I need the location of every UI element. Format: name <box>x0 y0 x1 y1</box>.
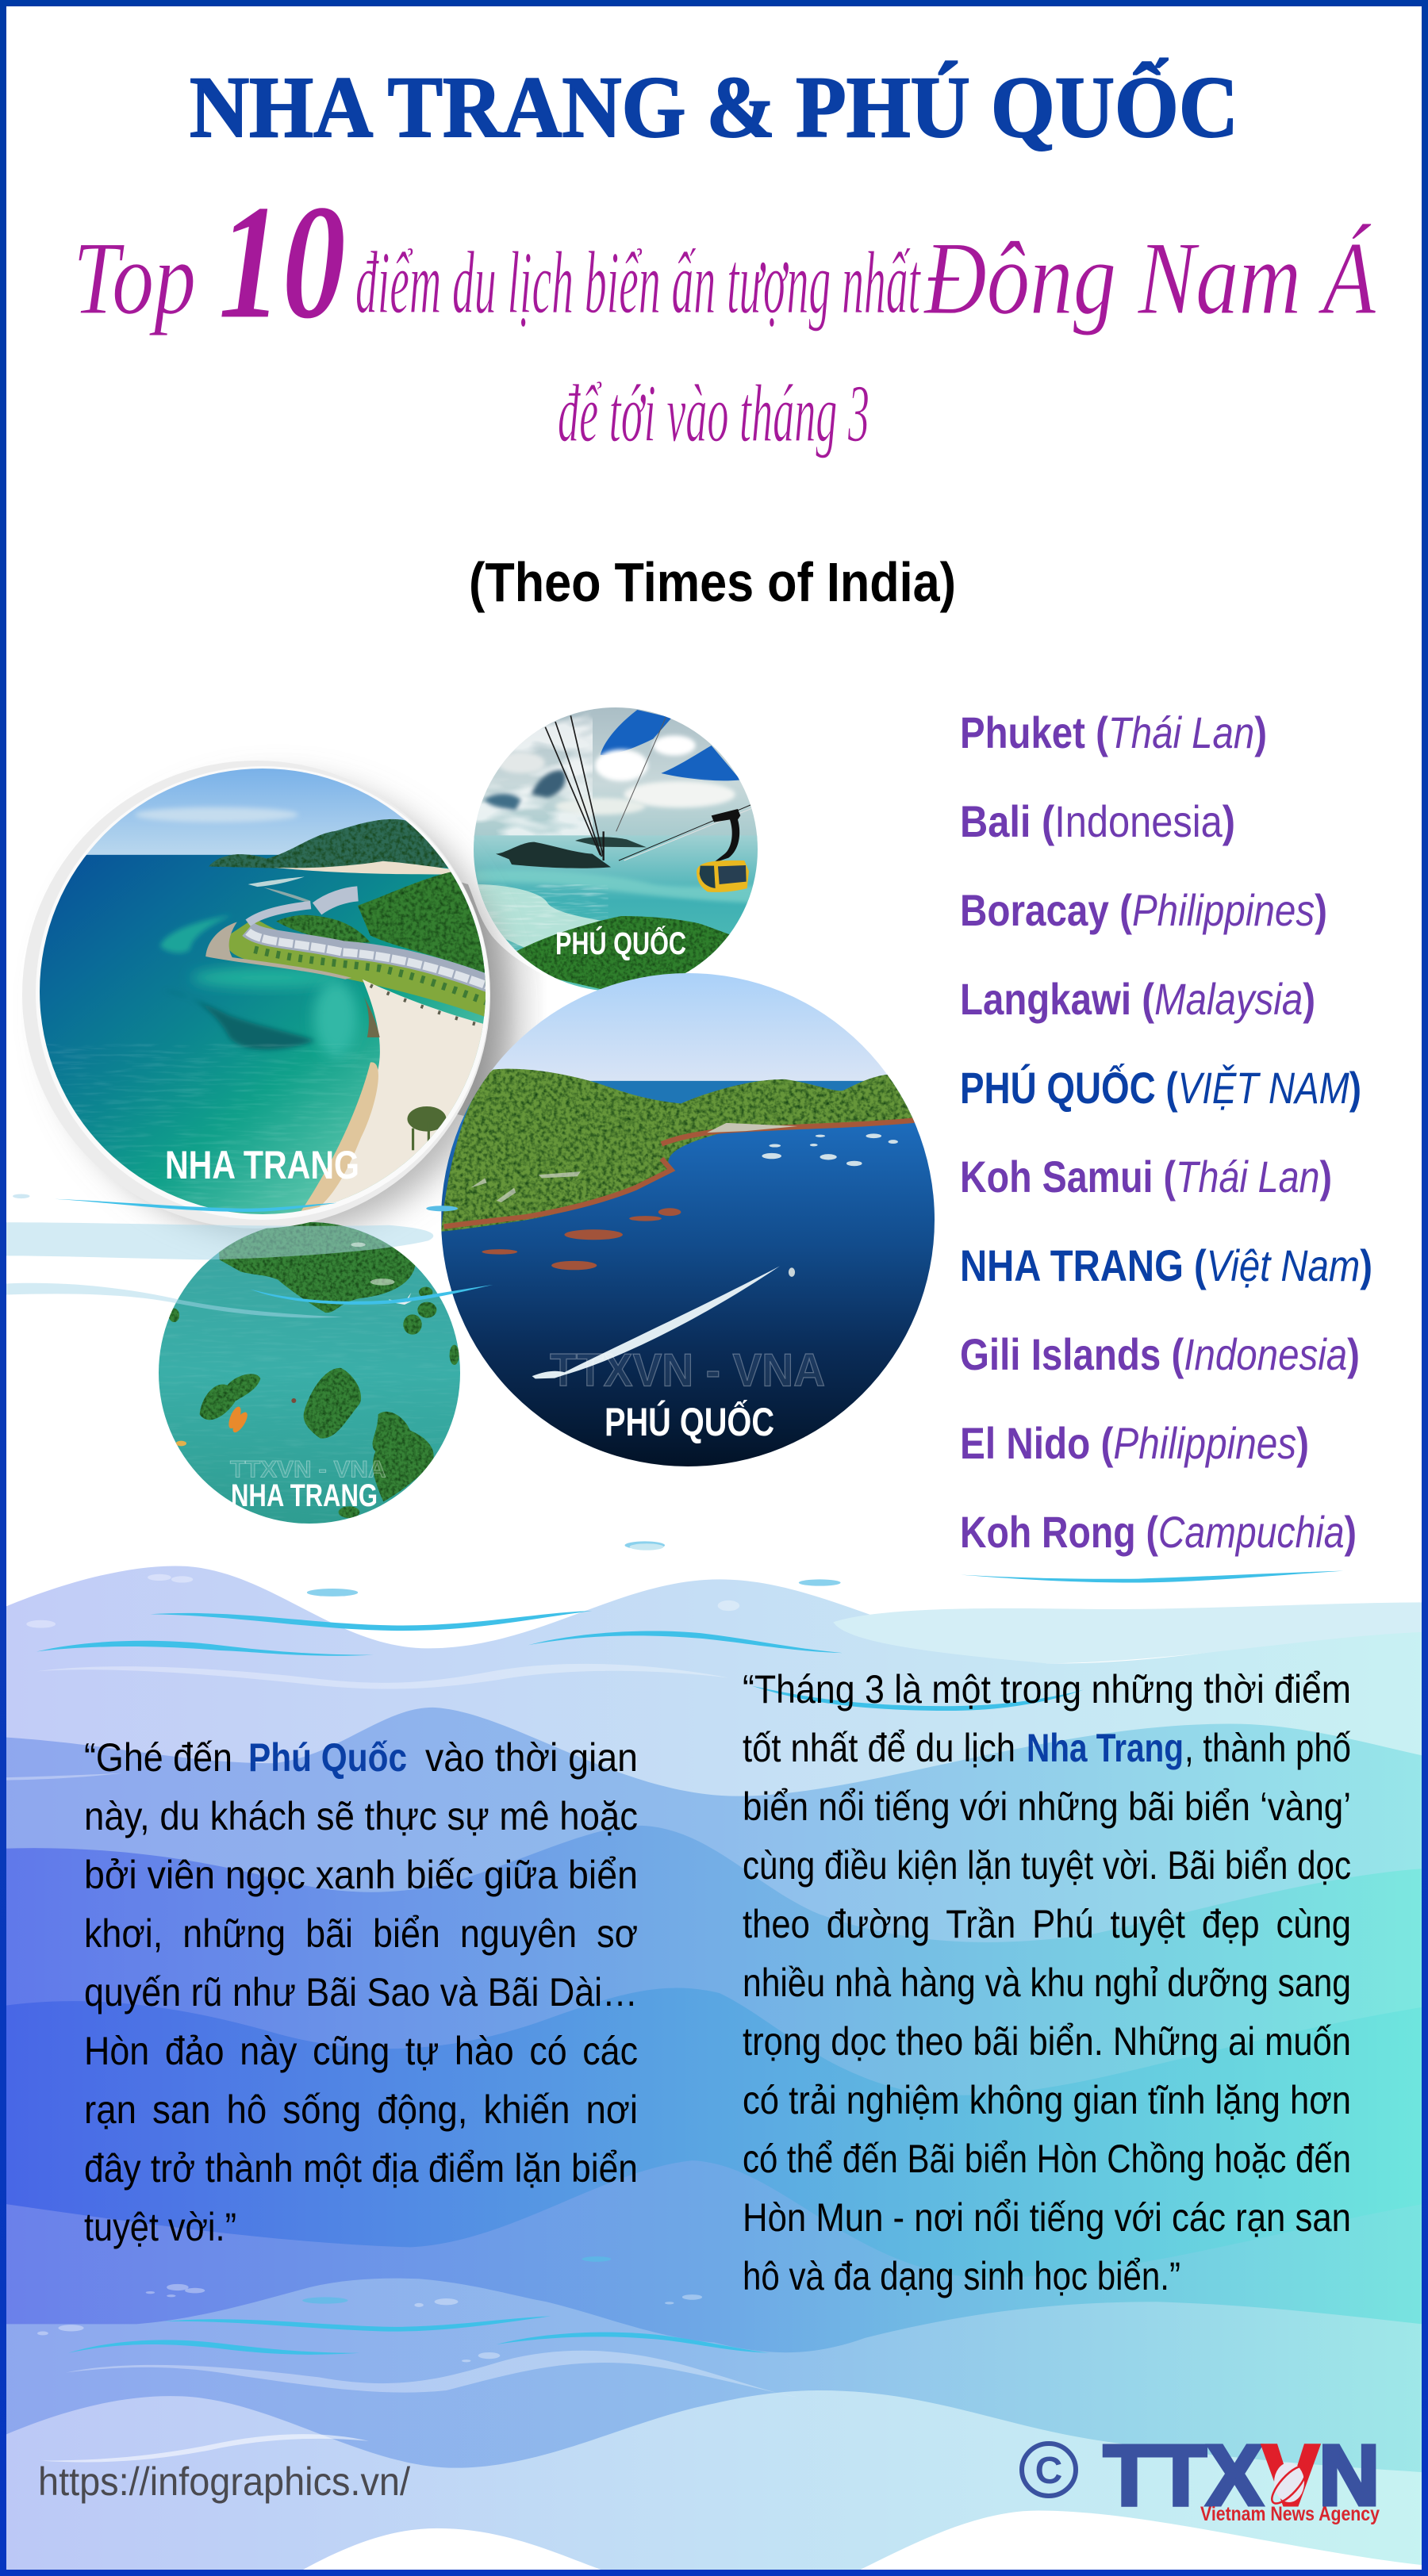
photo: Nha Trang mangrove: TTXVN - VNA <box>230 1457 386 1483</box>
quote: Phú Quốc: Phú Quốc <box>248 1735 407 1780</box>
quote: Phú Quốc: tuyệt vời.” <box>84 2205 236 2249</box>
caption: Nha Trang small: NHA TRANG <box>231 1478 378 1513</box>
list item 8: Gili Islands (Indonesia) <box>960 1329 1360 1379</box>
quote: Nha Trang: Nha Trang <box>1027 1726 1184 1770</box>
list item 3: Boracay (Philippines) <box>960 885 1327 935</box>
list item 2: Bali (Indonesia) <box>960 796 1235 846</box>
quote: Phú Quốc: vào thời gian <box>425 1735 638 1780</box>
photo: Phú Quốc cable car <box>468 702 766 999</box>
logo: TTXVN <box>1022 2427 1380 2525</box>
copyright mark <box>1022 2444 1076 2496</box>
list item 9: El Nido (Philippines) <box>960 1418 1309 1468</box>
agency name: Vietnam News Agency <box>1200 2503 1380 2525</box>
quote: Nha Trang: trọng dọc theo bãi biển. Những ai muốn <box>743 2019 1351 2064</box>
photo: Nha Trang coast <box>35 761 493 1218</box>
quote: Nha Trang: , thành phố <box>1184 1726 1351 1770</box>
caption: Phú Quốc main: PHÚ QUỐC <box>605 1399 774 1444</box>
water wave background <box>0 1541 1428 2576</box>
list item 7: NHA TRANG (Việt Nam) <box>960 1240 1372 1290</box>
quote: Nha Trang: Hòn Mun - nơi nổi tiếng với các rạn san <box>743 2195 1351 2240</box>
quote: Phú Quốc: quyến rũ như Bãi Sao và Bãi Dài… <box>84 1970 638 2014</box>
photo: Phú Quốc bay <box>441 968 937 1473</box>
quote: Nha Trang: có trải nghiệm không gian tĩnh lặng hơn <box>743 2078 1351 2122</box>
quote: Phú Quốc: “Ghé đến <box>84 1735 232 1780</box>
subtitle: top 10 sea destinations: Top <box>73 220 196 336</box>
quote: Nha Trang <box>743 1667 1351 2298</box>
list item 1: Phuket (Thái Lan) <box>960 707 1267 757</box>
quote: Nha Trang: “Tháng 3 là một trong những thời điểm <box>743 1667 1351 1712</box>
source URL: https://infographics.vn/ <box>38 2459 410 2504</box>
subtitle: top 10 sea destinations <box>73 171 1376 459</box>
list item 5: PHÚ QUỐC (VIỆT NAM) <box>960 1063 1361 1113</box>
subtitle: top 10 sea destinations: 10 <box>218 171 346 353</box>
quote: Phú Quốc: này, du khách sẽ thực sự mê hoặc <box>84 1794 638 1838</box>
floating wave overlay across photos <box>6 1194 663 1551</box>
subtitle: top 10 sea destinations: để tới vào tháng 3 <box>558 368 869 459</box>
photo: Phú Quốc bay: TTXVN - VNA <box>550 1345 825 1396</box>
rim of main photo <box>22 761 490 1229</box>
list item 4: Langkawi (Malaysia) <box>960 974 1315 1024</box>
shadow of main photo <box>49 780 579 1237</box>
quote: Phú Quốc: Hòn đảo này cũng tự hào có các <box>84 2029 638 2073</box>
source line: (Theo Times of India) <box>469 551 956 613</box>
quote: Nha Trang: theo đường Trần Phú tuyệt đẹp cùng <box>743 1902 1351 1946</box>
caption: Nha Trang main: NHA TRANG <box>165 1143 359 1187</box>
quote: Phú Quốc <box>84 1735 638 2249</box>
rim highlight <box>36 766 489 1220</box>
list item 10: Koh Rong (Campuchia) <box>960 1507 1357 1557</box>
caption: Phú Quốc small: PHÚ QUỐC <box>555 925 686 961</box>
quote: Phú Quốc: rạn san hô sống động, khiến nơi <box>84 2087 638 2132</box>
copyright mark: C <box>1035 2450 1062 2492</box>
destinations list <box>960 707 1372 1557</box>
globe emblem <box>1267 2461 1311 2509</box>
title: NHA TRANG & PHÚ QUỐC <box>190 58 1238 155</box>
quote: Phú Quốc: khơi, những bãi biển nguyên sơ <box>84 1911 638 1956</box>
list item 6: Koh Samui (Thái Lan) <box>960 1152 1332 1202</box>
quote: Nha Trang: tốt nhất để du lịch <box>743 1726 1015 1770</box>
photo: Nha Trang mangrove <box>151 1213 468 1531</box>
quote: Phú Quốc: đây trở thành một địa điểm lặn biển <box>84 2146 638 2191</box>
wordmark: TTXVN <box>1104 2427 1380 2523</box>
quote: Phú Quốc: bởi viên ngọc xanh biếc giữa biển <box>84 1853 638 1897</box>
quote: Nha Trang: biển nổi tiếng với những bãi biển ‘vàng’ <box>743 1784 1351 1829</box>
quote: Nha Trang: hô và đa dạng sinh học biển.” <box>743 2254 1180 2298</box>
